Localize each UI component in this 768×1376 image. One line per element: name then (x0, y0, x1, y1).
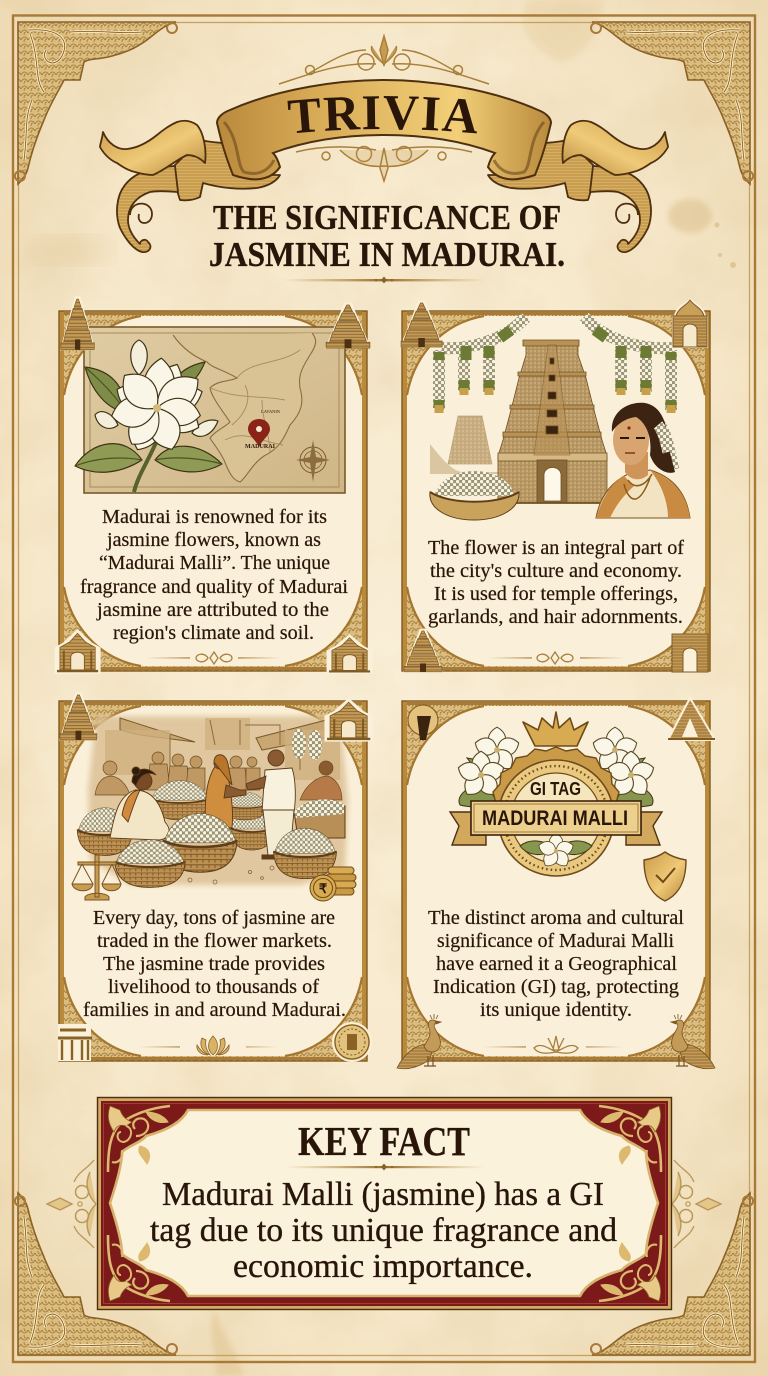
icon: shrine bottom left (404, 630, 442, 672)
icon: coins (310, 867, 356, 901)
text: GI tag (428, 908, 685, 1021)
seated woman (110, 767, 169, 840)
key fact divider (285, 1164, 485, 1170)
small background gopuram (430, 416, 500, 474)
key fact statement: economic importance. (233, 1248, 533, 1285)
compass rose (296, 440, 330, 482)
text: GI tag: significance of Madurai Malli (437, 931, 675, 952)
text: Madurai Malli: “Madurai Malli”. The unique (99, 553, 330, 574)
seal badge (493, 747, 619, 876)
text: culture and economy: the city's culture and economy. (430, 561, 682, 582)
icon: crown (523, 712, 588, 746)
ribbon centre band (217, 80, 551, 179)
title banner (99, 79, 669, 253)
parchment map: MADURAI (245, 443, 275, 450)
divider (487, 650, 625, 665)
key fact statement: Madurai Malli (jasmine) has a GI (162, 1176, 604, 1213)
key fact corner filigree (108, 1106, 661, 1301)
ornament below banner (296, 146, 472, 181)
text: GI tag: Indication (GI) tag, protecting (433, 977, 679, 998)
key fact side flourishes (47, 1160, 721, 1248)
panel: GI tag (397, 698, 715, 1069)
parchment map (84, 327, 345, 493)
text: flower trade: Every day, tons of jasmine are (93, 908, 335, 929)
TRIVIA heading: TRIVIA (288, 96, 477, 134)
jasmine bowl (430, 471, 519, 520)
icon: temple tower top right (326, 304, 370, 348)
left ribbon tail (100, 121, 280, 252)
icon: gold coin (333, 1023, 371, 1061)
woman with jasmine (596, 403, 690, 518)
divider (482, 1034, 624, 1056)
man in white (246, 750, 295, 859)
parchment map: LAVANIN (261, 409, 281, 414)
text: culture and economy: It is used for temple offerings, (434, 584, 678, 605)
ornament above banner (279, 36, 489, 84)
text: Madurai Malli (80, 507, 349, 644)
text: culture and economy: garlands, and hair adornments. (428, 607, 683, 628)
scattered petals (188, 866, 274, 884)
GI TAG label: GI TAG (530, 779, 581, 799)
text: Madurai Malli: jasmine flowers, known as (106, 530, 321, 551)
text: flower trade: families in and around Madurai. (83, 1000, 346, 1021)
text: Madurai Malli: fragrance and quality of Madurai (80, 577, 349, 598)
icon: triangular shrine top right (668, 698, 715, 740)
icon: mandapam bottom right (328, 636, 371, 672)
divider (145, 650, 283, 665)
panel: temple culture (401, 298, 710, 672)
icon: lotus divider (138, 1034, 278, 1056)
text: culture and economy: The flower is an integral part of (428, 538, 685, 559)
subtitle: THE SIGNIFICANCE OF (213, 198, 561, 237)
ribbon fold shading (224, 122, 544, 174)
text: Madurai Malli: Madurai is renowned for its (102, 507, 327, 528)
key fact heading: KEY FACT (298, 1118, 470, 1164)
key fact statement (150, 1176, 617, 1285)
jasmine sprays (456, 727, 656, 807)
map pin (248, 419, 270, 447)
subtitle divider (283, 276, 485, 284)
table of jasmine (294, 806, 345, 838)
key fact cream panel (110, 1110, 658, 1296)
text: Madurai Malli: region's climate and soil. (113, 623, 314, 644)
garlands (439, 317, 672, 413)
ribbon label: MADURAI MALLI (482, 807, 628, 830)
icon: peacock right (671, 1014, 715, 1069)
ribbon label (450, 801, 662, 845)
icon: balance scales (72, 855, 121, 900)
callout: key fact (98, 1098, 672, 1310)
icon: peacock left (397, 1014, 441, 1069)
icon: mandapam bottom left (56, 631, 99, 672)
text: flower trade: The jasmine trade provides (103, 954, 325, 975)
icon: temple tower top left (61, 298, 94, 350)
icon: gate bottom right (672, 634, 708, 672)
crowd (95, 752, 342, 800)
text: GI tag: its unique identity. (480, 1000, 632, 1021)
panel: map and flower (56, 298, 371, 672)
subtitle (209, 198, 565, 274)
market illustration (77, 715, 348, 887)
icon: medallion top left (408, 705, 438, 740)
right ribbon tail (488, 121, 668, 252)
icon: domed shrine top right (672, 298, 708, 348)
icon: shrine top right (326, 700, 371, 740)
hanging garlands (292, 729, 306, 759)
text: flower trade (83, 908, 346, 1021)
panel: flower market (58, 694, 371, 1061)
icon: jasmine flower (75, 340, 222, 492)
icon: pillared hall bottom left (58, 1024, 92, 1061)
text: GI tag: have earned it a Geographical (436, 954, 678, 975)
key fact statement: tag due to its unique fragrance and (150, 1212, 617, 1249)
icon: shield check (644, 852, 686, 901)
icon: gopuram top left (401, 302, 442, 347)
text: Madurai Malli: jasmine are attributed to the (96, 600, 329, 621)
baskets (77, 808, 133, 855)
standing woman (205, 755, 246, 828)
text: culture and economy (428, 538, 685, 628)
text: GI tag: The distinct aroma and cultural (428, 908, 685, 929)
main gopuram (498, 340, 612, 503)
stalls (120, 715, 346, 750)
icon: coins: ₹ (319, 881, 328, 896)
icon: tower top left (60, 694, 97, 740)
subtitle: JASMINE IN MADURAI. (209, 235, 565, 274)
text: flower trade: livelihood to thousands of (108, 977, 320, 998)
foreground baskets (163, 813, 237, 872)
text: flower trade: traded in the flower markets. (97, 931, 332, 952)
